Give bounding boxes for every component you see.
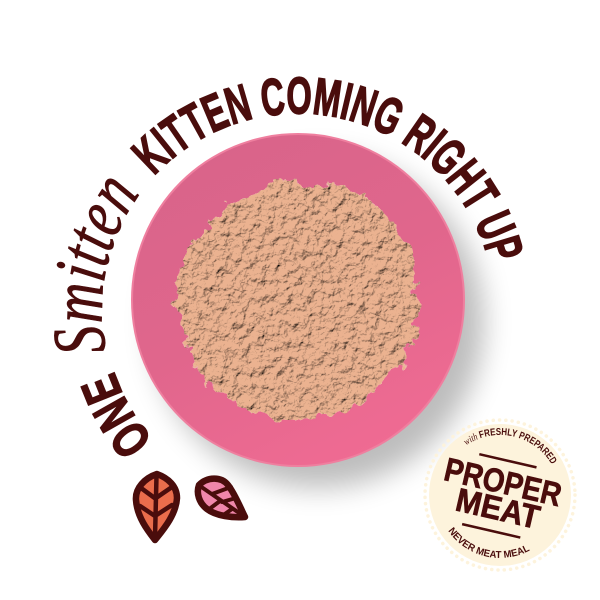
headline: one: ONE [80,372,148,456]
plate shadow [152,156,484,488]
plate [131,133,465,467]
headline: kitten coming right up: KITTEN COMING RIGHT UP [130,76,522,258]
icon: pink leaf [198,479,245,517]
badge top text: with FRESHLY PREPARED [464,428,556,464]
wet food [174,179,421,423]
badge main text: MEAT [452,481,544,536]
badge bottom text: NEVER MEAT MEAL [448,527,530,558]
headline: smitten: Smitten [54,178,140,351]
curved headline [54,76,522,456]
icon: red leaf [136,474,177,540]
badge: proper meat [423,418,577,572]
badge main text [434,447,566,545]
badge main text: PROPER [441,450,565,513]
